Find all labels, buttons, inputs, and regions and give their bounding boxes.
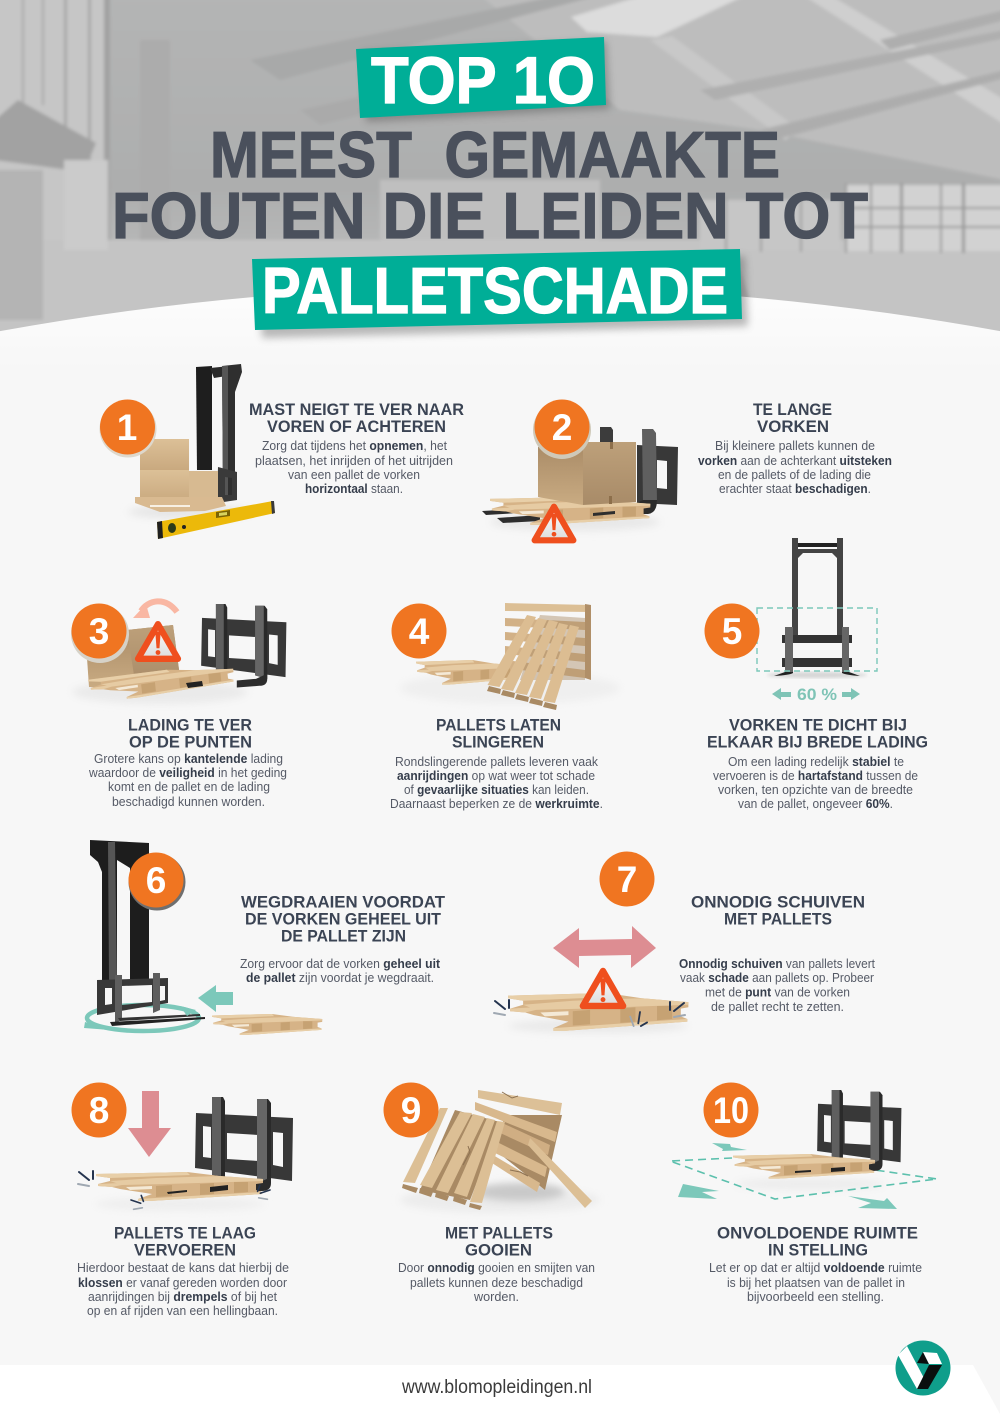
heading: VORKEN <box>757 417 829 436</box>
badge: number 2: 2 <box>552 407 572 448</box>
body text: de pallet zijn voordat je wegdraait. <box>246 971 434 985</box>
curved floor edge <box>0 286 1000 370</box>
badge: number 8: 8 <box>89 1090 109 1131</box>
heading: OP DE PUNTEN <box>129 732 252 752</box>
banner: PALLETSCHADE: PALLETSCHADE <box>262 254 728 327</box>
body text: op en af rijden van een hellingbaan. <box>87 1304 278 1318</box>
heading: SLINGEREN <box>452 732 544 752</box>
panel: step 6 <box>84 840 446 1035</box>
illustration: forks too long under pallet with box <box>482 427 678 540</box>
badge: number 8 <box>72 1082 126 1138</box>
heading: MET PALLETS <box>724 910 832 928</box>
heading: PALLETS LATEN <box>436 716 561 734</box>
panel: step 10 <box>670 1082 937 1304</box>
heading: meest gemaakte fouten <box>112 118 868 252</box>
title <box>112 37 868 338</box>
body text: Om een lading redelijk stabiel te <box>728 755 904 769</box>
panel: step 8 <box>72 1082 293 1318</box>
body text: Let er op dat er altijd voldoende ruimte <box>709 1261 922 1275</box>
body text: de pallet recht te zetten. <box>711 1000 844 1014</box>
heading: ONVOLDOENDE RUIMTE <box>717 1224 918 1242</box>
panel: step 2 <box>482 400 892 540</box>
heading: LADING TE VER <box>128 716 252 734</box>
body text: en de pallets of de lading die <box>718 468 871 482</box>
body text <box>390 755 603 811</box>
heading <box>753 400 832 436</box>
heading <box>114 1224 256 1260</box>
heading <box>717 1224 918 1260</box>
badge: number 5: 5 <box>722 611 742 652</box>
heading: PALLETS TE LAAG <box>114 1224 256 1242</box>
body text: bijvoorbeeld een stelling. <box>747 1290 884 1304</box>
badge: number 3 <box>71 604 129 663</box>
heading: IN STELLING <box>768 1240 868 1260</box>
body text: of gevaarlijke situaties kan leiden. <box>404 783 589 797</box>
body text <box>713 755 918 811</box>
body text: aanrijdingen bij drempels of bij het <box>88 1290 278 1304</box>
illustration: tilting load on fork tips <box>72 601 286 704</box>
body text: Hierdoor bestaat de kans dat hierbij de <box>77 1261 289 1275</box>
heading: TE LANGE <box>753 400 832 419</box>
body text: klossen er vanaf gereden worden door <box>78 1276 287 1290</box>
badge: number 4: 4 <box>409 611 430 652</box>
heading: MAST NEIGT TE VER NAAR <box>249 400 464 419</box>
heading: meest gemaakte fouten: FOUTEN DIE LEIDEN TOT <box>112 179 868 252</box>
illustration: pallets lying around <box>400 603 620 710</box>
badge: number 1: 1 <box>117 407 137 448</box>
body text <box>398 1261 595 1304</box>
heading: DE PALLET ZIJN <box>281 926 406 946</box>
body text: komt en de pallet en de lading <box>108 780 270 794</box>
badge: number 1 <box>100 400 156 458</box>
body text: Bij kleinere pallets kunnen de <box>715 439 875 453</box>
badge: number 5 <box>704 604 760 658</box>
heading: GOOIEN <box>465 1240 532 1260</box>
body text: is bij het plaatsen van de pallet in <box>727 1276 905 1290</box>
heading: meest gemaakte fouten: MEEST GEMAAKTE <box>210 118 780 191</box>
panel: step 5 <box>704 538 928 811</box>
body text: met de punt van de vorken <box>705 986 850 1000</box>
body text: Onnodig schuiven van pallets levert <box>679 957 875 971</box>
body text <box>255 439 453 496</box>
badge: number 10 <box>704 1082 758 1138</box>
body text: Zorg ervoor dat de vorken geheel uit <box>240 957 441 971</box>
heading: VERVOEREN <box>134 1240 236 1260</box>
heading <box>241 892 446 946</box>
panel: step 4 <box>390 603 620 811</box>
body text: vorken aan de achterkant uitsteken <box>698 454 892 468</box>
banner: TOP 10: TOP 1O <box>371 43 595 117</box>
illustration: broken thrown pallets <box>400 1090 600 1213</box>
illustration: turning away while forks in pallet <box>84 840 322 1035</box>
heading: DE VORKEN GEHEEL UIT <box>245 910 442 928</box>
heading <box>691 892 865 928</box>
body text <box>240 957 441 985</box>
body text: Daarnaast beperken ze de werkruimte. <box>390 797 603 811</box>
body text: beschadigd kunnen worden. <box>112 795 265 809</box>
heading <box>445 1224 553 1260</box>
logo <box>896 1340 950 1396</box>
body text: Door onnodig gooien en smijten van <box>398 1261 595 1275</box>
badge: number 7 <box>600 852 654 906</box>
badge: number 2 <box>533 400 591 459</box>
panel: step 7 <box>494 852 875 1033</box>
badge: number 6: 6 <box>146 860 166 901</box>
body text: vorken, ten opzichte van de breedte <box>718 783 913 797</box>
body text: worden. <box>473 1290 519 1304</box>
body text: van de pallet, ongeveer 60%. <box>738 797 893 811</box>
heading: WEGDRAAIEN VOORDAT <box>241 892 446 912</box>
heading: ELKAAR BIJ BREDE LADING <box>707 732 928 752</box>
badge: number 9 <box>384 1082 438 1138</box>
body text: van een pallet de vorken <box>288 468 420 482</box>
heading: ONNODIG SCHUIVEN <box>691 892 865 912</box>
body text: pallets kunnen deze beschadigd <box>410 1276 583 1290</box>
footer band <box>0 1365 1000 1414</box>
body text: plaatsen, het inrijden of het uitrijden <box>255 454 453 468</box>
footer url: www.blomopleidingen.nl <box>401 1376 592 1398</box>
body text: vaak schade aan pallets op. Probeer <box>680 971 874 985</box>
body text: Grotere kans op kantelende lading <box>94 752 283 766</box>
illustration: pushing pallets sideways <box>494 926 688 1033</box>
body text: Rondslingerende pallets leveren vaak <box>395 755 599 769</box>
body text <box>698 439 892 496</box>
heading: VOREN OF ACHTEREN <box>267 417 446 436</box>
body text: erachter staat beschadigen. <box>719 482 871 496</box>
illustration: insufficient rack space <box>670 1090 937 1209</box>
heading: VORKEN TE DICHT BIJ <box>729 716 907 734</box>
panel: step 9 <box>384 1082 600 1304</box>
badge: number 6 <box>128 852 186 910</box>
header photo: warehouse interior <box>0 0 1000 345</box>
body text: Zorg dat tijdens het opnemen, het <box>262 439 448 453</box>
badge: number 3: 3 <box>89 611 109 652</box>
body text <box>88 752 287 809</box>
illustration: mast front view with 60 percent width: 60 % <box>797 686 837 704</box>
panel: step 1 <box>100 364 464 539</box>
badge: number 10: 10 <box>713 1090 749 1131</box>
badge: number 9: 9 <box>401 1090 421 1131</box>
panel: step 3 <box>71 601 287 809</box>
body text: waardoor de veiligheid in het geding <box>88 766 287 780</box>
badge: number 4 <box>392 604 446 658</box>
body text: horizontaal staan. <box>305 482 403 496</box>
illustration: tilted mast with boxes and spirit level <box>128 364 275 539</box>
heading <box>707 716 928 752</box>
heading <box>128 716 252 752</box>
badge: number 7: 7 <box>617 859 637 900</box>
body text: vervoeren is de hartafstand tussen de <box>713 769 918 783</box>
body text <box>709 1261 922 1304</box>
body text: aanrijdingen op wat weer tot schade <box>397 769 595 783</box>
heading: MET PALLETS <box>445 1224 553 1242</box>
body text <box>77 1261 289 1318</box>
heading <box>249 400 464 436</box>
illustration: mast front view with 60 percent width <box>757 538 877 704</box>
illustration: transporting pallets too low <box>78 1091 293 1211</box>
heading <box>436 716 561 752</box>
body text <box>679 957 875 1014</box>
